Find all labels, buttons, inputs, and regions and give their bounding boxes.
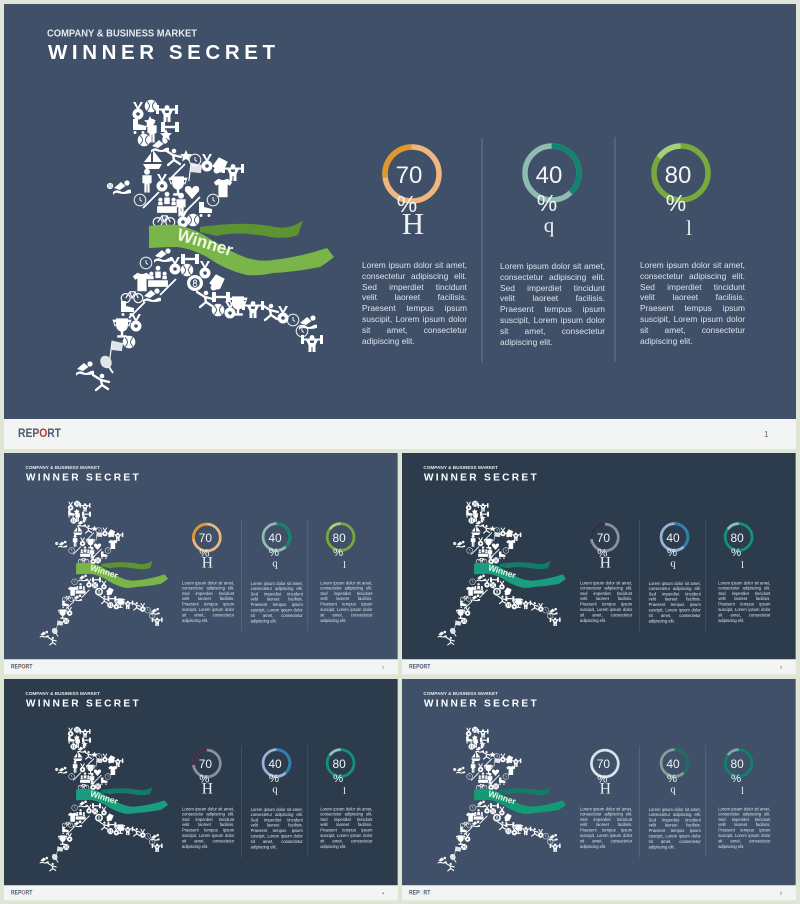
text block 3: adipiscing elit. [718, 844, 744, 849]
donut: 40: 40 [536, 162, 562, 189]
donut: 40: q [670, 784, 676, 795]
subtitle: COMPANY & BUSINESS MARKET [47, 28, 197, 40]
text block 3: velit laoreet facilisis. [320, 822, 372, 827]
text block 3: Lorem ipsum dolor sit amet, [640, 260, 745, 270]
text block 3: consectetur adipiscing elit. [320, 586, 372, 591]
donut: 40: % [667, 547, 677, 559]
text block 3: velit laoreet facilisis. [718, 596, 770, 601]
text block 2 [250, 807, 303, 850]
divider [307, 745, 309, 857]
donut: 80 [725, 750, 752, 797]
text block 3: sit amet, consectetur [640, 325, 745, 335]
donut: 80: l [343, 560, 346, 571]
footer bar [4, 885, 398, 900]
text block 2 [648, 581, 701, 624]
text block 3: consectetur adipiscing elit. [640, 271, 745, 281]
text block 1 [182, 580, 234, 623]
donut: 70 [385, 147, 439, 241]
text block 1: consectetur adipiscing elit. [182, 586, 234, 591]
text block 2: consectetur adipiscing elit. [649, 812, 701, 817]
donut: 70: H [402, 206, 424, 241]
text block 2: Praesent tempus ipsum [251, 828, 303, 833]
donut: 70: 70 [199, 531, 212, 545]
text block 3: Sed imperdiet tincidunt [320, 591, 372, 596]
text block 3: Praesent tempus ipsum [718, 828, 770, 833]
donut: 70: H [600, 554, 611, 571]
divider [307, 519, 309, 631]
footer brand: REPORT [18, 426, 62, 440]
background [402, 679, 796, 885]
footer brand: REPORT [409, 890, 431, 896]
text block 1: Lorem ipsum dolor sit amet, [580, 806, 632, 811]
donut: 80: % [333, 773, 343, 785]
donut: 70: H [202, 780, 213, 797]
text block 1: Sed imperdiet tincidunt [362, 282, 467, 292]
divider [614, 137, 616, 362]
text block 2 [250, 581, 303, 624]
donut: 40: q [544, 213, 555, 237]
text block 1: velit laoreet facilisis. [580, 822, 632, 827]
slide 4: thumbnail [4, 679, 398, 900]
text block 3: adipiscing elit. [718, 618, 744, 623]
donut: 40: q [670, 558, 676, 569]
text block 3: Praesent tempus ipsum [320, 828, 372, 833]
donut: 70 [591, 750, 618, 797]
donut: 40: 40 [666, 757, 680, 771]
ribbon: winner banner: Winner [89, 562, 120, 580]
text block 3: Lorem ipsum dolor sit amet, [718, 806, 770, 811]
text block 2: Lorem ipsum dolor sit amet, [251, 807, 303, 812]
donut: 70 [193, 750, 220, 797]
text block 1: sit amet, consectetur [362, 325, 467, 335]
donut: 40: % [269, 773, 279, 785]
footer bar [4, 659, 398, 674]
icon: running figure [438, 727, 561, 871]
text block 2: Lorem ipsum dolor sit amet, [251, 581, 303, 586]
text block 2 [500, 261, 605, 347]
ribbon: winner banner [76, 560, 168, 588]
text block 1: Sed imperdiet tincidunt [580, 591, 632, 596]
text block 3: adipiscing elit. [640, 336, 693, 346]
footer brand: REPORT [11, 890, 33, 896]
donut: 70: H [600, 780, 611, 797]
text block 2: sit amet, consectetur [649, 613, 701, 618]
ribbon: winner banner: Winner [175, 225, 236, 260]
text block 3: Sed imperdiet tincidunt [320, 817, 372, 822]
text block 3: Praesent tempus ipsum [718, 602, 770, 607]
text block 3 [718, 806, 770, 849]
ribbon: winner banner [149, 220, 334, 275]
text block 2: Praesent tempus ipsum [251, 602, 303, 607]
text block 1: consectetur adipiscing elit. [580, 586, 632, 591]
divider [705, 745, 707, 857]
text block 2: Praesent tempus ipsum [649, 828, 701, 833]
footer bar [402, 885, 796, 900]
ribbon: winner banner [474, 786, 566, 814]
text block 2: velit laoreet facilisis. [251, 823, 303, 828]
text block 2: Lorem ipsum dolor sit amet, [649, 581, 701, 586]
text block 2: adipiscing elit. [649, 618, 675, 623]
donut: 70 [591, 524, 618, 571]
text block 1: sit amet, consectetur [580, 612, 632, 617]
text block 1: Praesent tempus ipsum [362, 303, 467, 313]
text block 2: suscipit, Lorem ipsum dolor [251, 608, 303, 613]
text block 1: velit laoreet facilisis. [580, 596, 632, 601]
text block 2: Sed imperdiet tincidunt [500, 283, 605, 293]
donut: 40 [263, 750, 290, 795]
slide 5: thumbnail [402, 679, 796, 900]
donut: 40: % [537, 190, 557, 216]
donut: 40: % [667, 773, 677, 785]
text block 3: velit laoreet facilisis. [320, 596, 372, 601]
donut: 80 [327, 750, 354, 797]
donut: 80: % [731, 547, 741, 559]
text block 2: Praesent tempus ipsum [649, 602, 701, 607]
text block 1: suscipit, Lorem ipsum dolor [580, 607, 632, 612]
title: WINNER SECRET [424, 472, 538, 483]
text block 1 [182, 806, 234, 849]
text block 2: Sed imperdiet tincidunt [649, 818, 701, 822]
text block 1: adipiscing elit. [580, 618, 606, 623]
donut: 70 [193, 524, 220, 571]
icon: running figure [438, 501, 561, 645]
text block 1: suscipit, Lorem ipsum dolor [182, 833, 234, 838]
text block 2: Sed imperdiet tincidunt [649, 592, 701, 596]
text block 2: sit amet, consectetur [251, 613, 303, 618]
ribbon: winner banner: Winner [487, 562, 518, 580]
text block 3: velit laoreet facilisis. [718, 822, 770, 827]
text block 2: adipiscing elit. [500, 337, 553, 347]
page number: 5 [780, 890, 783, 895]
donut: 40: q [272, 784, 278, 795]
title: WINNER SECRET [424, 698, 538, 709]
donut: 70: 70 [396, 162, 422, 189]
icon: running figure [40, 501, 163, 645]
text block 1: suscipit, Lorem ipsum dolor [580, 833, 632, 838]
divider [705, 519, 707, 631]
title: WINNER SECRET [48, 41, 275, 64]
donut: 40: 40 [268, 531, 282, 545]
slide 1: main panel [4, 4, 796, 449]
page number: 1 [764, 430, 769, 439]
text block 1: sit amet, consectetur [182, 838, 234, 843]
donut: 80: l [686, 216, 692, 240]
text block 3: Sed imperdiet tincidunt [640, 282, 745, 292]
text block 1: Lorem ipsum dolor sit amet, [580, 580, 632, 585]
text block 1: Praesent tempus ipsum [580, 828, 632, 833]
background [4, 453, 398, 659]
ribbon: winner banner: Winner [89, 788, 120, 806]
text block 2: adipiscing elit. [649, 844, 675, 849]
text block 1 [580, 806, 632, 849]
donut: 80: % [333, 547, 343, 559]
donut: 70: % [597, 547, 607, 559]
text block 2: Sed imperdiet tincidunt [251, 818, 303, 822]
text block 1: Sed imperdiet tincidunt [182, 591, 234, 596]
donut: 70: % [397, 191, 417, 217]
donut: 80: 80 [665, 162, 691, 189]
text block 1: Lorem ipsum dolor sit amet, [182, 580, 234, 585]
text block 2: adipiscing elit. [251, 844, 277, 849]
text block 2: suscipit, Lorem ipsum dolor [649, 834, 701, 839]
text block 1: adipiscing elit. [182, 844, 208, 849]
text block 1: Lorem ipsum dolor sit amet, [362, 260, 467, 270]
donut: 80: % [731, 773, 741, 785]
text block 1 [580, 580, 632, 623]
text block 1: Sed imperdiet tincidunt [182, 817, 234, 822]
divider [639, 746, 641, 857]
text block 1: consectetur adipiscing elit. [580, 812, 632, 817]
donut: 80: 80 [332, 531, 346, 545]
text block 2: Praesent tempus ipsum [500, 304, 605, 314]
donut: 70: H [202, 554, 213, 571]
donut: 40: q [272, 558, 278, 569]
text block 3: suscipit, Lorem ipsum dolor [320, 607, 372, 612]
text block 3: Praesent tempus ipsum [640, 303, 745, 313]
text block 3: adipiscing elit. [320, 618, 346, 623]
text block 3: Sed imperdiet tincidunt [718, 817, 770, 822]
text block 1: consectetur adipiscing elit. [362, 271, 467, 281]
text block 2: consectetur adipiscing elit. [500, 272, 605, 282]
text block 1: Praesent tempus ipsum [580, 602, 632, 607]
ribbon: winner banner [474, 560, 566, 588]
text block 2: consectetur adipiscing elit. [649, 586, 701, 591]
text block 1: Sed imperdiet tincidunt [580, 817, 632, 822]
donut: 80: 80 [730, 757, 744, 771]
page number: 2 [382, 664, 384, 669]
donut: 70: 70 [597, 757, 610, 771]
text block 3: Lorem ipsum dolor sit amet, [320, 806, 372, 811]
text block 3: consectetur adipiscing elit. [718, 586, 770, 591]
text block 1: adipiscing elit. [362, 336, 415, 346]
text block 2: velit laoreet facilisis. [649, 597, 701, 602]
text block 2: sit amet, consectetur [649, 839, 701, 844]
text block 2: suscipit, Lorem ipsum dolor [251, 834, 303, 839]
divider [241, 520, 243, 631]
text block 1: adipiscing elit. [182, 618, 208, 623]
subtitle: COMPANY & BUSINESS MARKET [25, 691, 100, 697]
donut: 40 [661, 524, 688, 569]
text block 1: adipiscing elit. [580, 844, 606, 849]
title: WINNER SECRET [26, 472, 140, 483]
text block 1: consectetur adipiscing elit. [182, 812, 234, 817]
text block 2: suscipit, Lorem ipsum dolor [500, 315, 605, 325]
donut: 80: 80 [730, 531, 744, 545]
donut: 70: % [199, 773, 209, 785]
icon: running figure [76, 100, 323, 390]
text block 1: Lorem ipsum dolor sit amet, [182, 806, 234, 811]
text block 3: Lorem ipsum dolor sit amet, [320, 580, 372, 585]
text block 1: sit amet, consectetur [182, 612, 234, 617]
text block 1: velit laoreet facilisis. [362, 292, 467, 302]
text block 3: sit amet, consectetur [718, 838, 770, 843]
text block 3: consectetur adipiscing elit. [718, 812, 770, 817]
text block 1: sit amet, consectetur [580, 838, 632, 843]
text block 3: sit amet, consectetur [718, 612, 770, 617]
slide 3: thumbnail [402, 453, 796, 674]
text block 3: suscipit, Lorem ipsum dolor [718, 833, 770, 838]
text block 3 [640, 260, 745, 346]
page number: 4 [382, 890, 385, 895]
donut: 80: 80 [332, 757, 346, 771]
donut: 70: % [199, 547, 209, 559]
text block 1 [362, 260, 467, 346]
text block 2: suscipit, Lorem ipsum dolor [649, 608, 701, 613]
text block 2: velit laoreet facilisis. [500, 293, 605, 303]
text block 2: sit amet, consectetur [251, 839, 303, 844]
donut: 80 [654, 146, 708, 240]
text block 3: Sed imperdiet tincidunt [718, 591, 770, 596]
divider [639, 520, 641, 631]
subtitle: COMPANY & BUSINESS MARKET [25, 465, 100, 471]
text block 3 [718, 580, 770, 623]
donut: 40 [263, 524, 290, 569]
footer brand: REPORT [409, 664, 431, 670]
text block 2: adipiscing elit. [251, 618, 277, 623]
background [4, 679, 398, 885]
text block 3: suscipit, Lorem ipsum dolor [320, 833, 372, 838]
donut: 80: l [741, 560, 744, 571]
donut: 80 [725, 524, 752, 571]
text block 1: suscipit, Lorem ipsum dolor [182, 607, 234, 612]
text block 2: consectetur adipiscing elit. [251, 586, 303, 591]
background [4, 4, 796, 419]
title: WINNER SECRET [26, 698, 140, 709]
donut: 80: l [343, 786, 346, 797]
text block 3: Lorem ipsum dolor sit amet, [718, 580, 770, 585]
donut: 40: 40 [666, 531, 680, 545]
donut: 80: % [666, 190, 686, 216]
text block 2 [648, 807, 701, 850]
subtitle: COMPANY & BUSINESS MARKET [423, 691, 498, 697]
text block 2: Lorem ipsum dolor sit amet, [500, 261, 605, 271]
donut: 70: 70 [199, 757, 212, 771]
donut: 40 [661, 750, 688, 795]
page number: 3 [780, 664, 783, 669]
subtitle: COMPANY & BUSINESS MARKET [423, 465, 498, 471]
text block 3: Praesent tempus ipsum [320, 602, 372, 607]
footer bar [402, 659, 796, 674]
divider [481, 138, 483, 363]
text block 2: velit laoreet facilisis. [251, 597, 303, 602]
background [402, 453, 796, 659]
text block 2: sit amet, consectetur [500, 326, 605, 336]
slide 2: thumbnail [4, 453, 398, 674]
donut: 40: 40 [268, 757, 282, 771]
text block 3: consectetur adipiscing elit. [320, 812, 372, 817]
text block 1: velit laoreet facilisis. [182, 822, 234, 827]
text block 3 [320, 580, 372, 623]
text block 3: velit laoreet facilisis. [640, 292, 745, 302]
text block 2: consectetur adipiscing elit. [251, 812, 303, 817]
ribbon: winner banner [76, 786, 168, 814]
text block 2: Lorem ipsum dolor sit amet, [649, 807, 701, 812]
divider [241, 746, 243, 857]
donut: 70: % [597, 773, 607, 785]
donut: 80 [327, 524, 354, 571]
text block 1: velit laoreet facilisis. [182, 596, 234, 601]
footer brand: REPORT [11, 664, 33, 670]
text block 3: sit amet, consectetur [320, 838, 372, 843]
ribbon: winner banner: Winner [487, 788, 518, 806]
footer bar [4, 419, 796, 449]
text block 3 [320, 806, 372, 849]
text block 2: velit laoreet facilisis. [649, 823, 701, 828]
icon: running figure [40, 727, 163, 871]
text block 1: Praesent tempus ipsum [182, 828, 234, 833]
text block 1: suscipit, Lorem ipsum dolor [362, 314, 467, 324]
donut: 80: l [741, 786, 744, 797]
text block 1: Praesent tempus ipsum [182, 602, 234, 607]
text block 3: suscipit, Lorem ipsum dolor [718, 607, 770, 612]
donut: 40 [525, 146, 579, 237]
donut: 70: 70 [597, 531, 610, 545]
text block 3: adipiscing elit. [320, 844, 346, 849]
donut: 40: % [269, 547, 279, 559]
text block 3: suscipit, Lorem ipsum dolor [640, 314, 745, 324]
text block 2: Sed imperdiet tincidunt [251, 592, 303, 596]
text block 3: sit amet, consectetur [320, 612, 372, 617]
